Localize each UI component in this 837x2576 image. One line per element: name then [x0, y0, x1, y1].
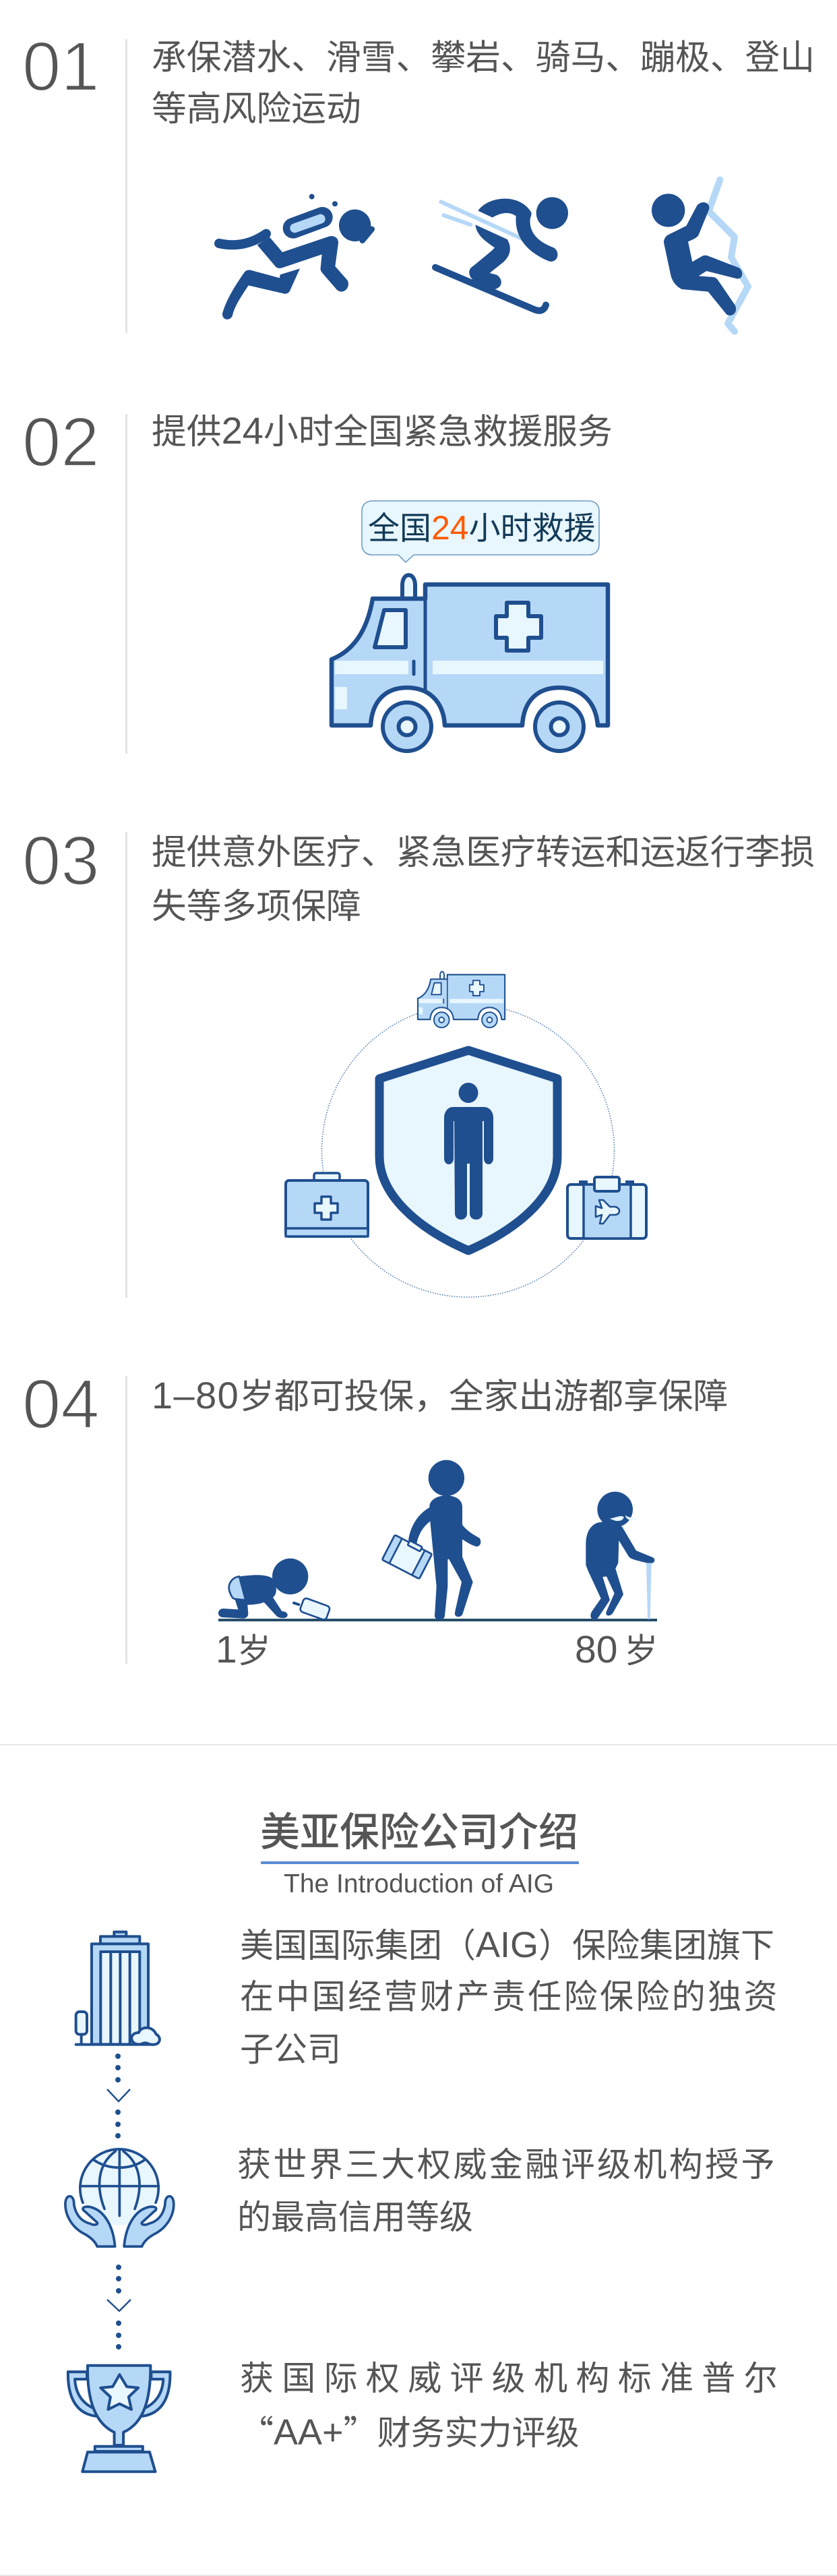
dotted ring — [322, 1005, 615, 1297]
icon: ambulance — [332, 575, 608, 751]
age figures — [218, 1460, 657, 1621]
text block 1 line 2: 在中国经营财产责任险保险的独资 — [240, 1978, 780, 2016]
protection diagram — [284, 971, 648, 1298]
divider: page bottom — [0, 2575, 837, 2576]
icon: travel suitcase — [567, 1177, 646, 1238]
connector 2 — [107, 2265, 131, 2349]
icons: sports — [214, 177, 751, 335]
heading 03 line 1: 提供意外医疗、紧急医疗转运和运返行李损 — [152, 833, 815, 872]
callout and ambulance — [329, 500, 611, 753]
divider 04 — [125, 1376, 127, 1664]
divider 03 — [125, 832, 127, 1298]
heading 01 line 2: 等高风险运动 — [152, 89, 361, 128]
icon: person — [444, 1083, 493, 1220]
text block 3 line 1: 获国际权威评级机构标准普尔 — [240, 2360, 786, 2397]
divider: top of company introduction — [0, 1744, 837, 1745]
icon: baby — [218, 1559, 330, 1621]
text block 1 line 3: 子公司 — [240, 2031, 341, 2068]
text block 1 line 1: 美国国际集团（AIG）保险集团旗下 — [240, 1925, 774, 1965]
heading 02: 提供24小时全国紧急救援服务 — [152, 409, 613, 452]
icon: office building — [76, 1932, 160, 2045]
number 04: 04 — [22, 1365, 100, 1443]
number 02: 02 — [22, 403, 100, 481]
icon: trophy — [68, 2366, 170, 2472]
text block 2 line 2: 的最高信用等级 — [237, 2198, 473, 2236]
label: 80 years: 80岁 — [575, 1628, 658, 1671]
intro title: 美亚保险公司介绍 — [260, 1810, 578, 1855]
heading 01 line 1: 承保潜水、滑雪、攀岩、骑马、蹦极、登山 — [152, 38, 815, 77]
text block 3 line 2: “AA+”财务实力评级 — [240, 2406, 580, 2455]
panel: company introduction — [64, 1810, 786, 2473]
icon: diver — [219, 194, 372, 320]
number 01: 01 — [22, 28, 100, 105]
panel: 01 high-risk sports — [22, 28, 815, 335]
icon: shield — [379, 1050, 557, 1251]
connector 1 — [107, 2054, 130, 2138]
divider 01 — [125, 39, 127, 333]
icon: small ambulance — [416, 971, 506, 1027]
heading 03 line 2: 失等多项保障 — [152, 887, 361, 926]
icon: adult with briefcase — [382, 1460, 480, 1620]
icon: skier — [435, 197, 568, 311]
icon: globe in hands — [65, 2147, 174, 2246]
intro subtitle: The Introduction of AIG — [284, 1869, 554, 1898]
intro icons column — [64, 1931, 175, 2473]
panel: 04 age coverage — [22, 1365, 728, 1671]
callout bubble — [362, 501, 599, 562]
callout bubble: 全国24小时救援 — [368, 509, 596, 547]
icon: climber — [652, 180, 748, 332]
divider 02 — [125, 414, 127, 754]
title underline — [261, 1861, 579, 1864]
icon: first aid kit — [286, 1173, 368, 1236]
icon: elderly person with cane — [586, 1492, 654, 1619]
panel: 03 multiple protections — [22, 822, 815, 1298]
heading 04: 1–80岁都可投保，全家出游都享保障 — [152, 1374, 728, 1416]
panel: 02 24-hour rescue — [22, 403, 613, 754]
text block 2 line 1: 获世界三大权威金融评级机构授予 — [237, 2146, 777, 2184]
ground line — [218, 1619, 657, 1621]
number 03: 03 — [22, 822, 100, 899]
label: 1 year: 1岁 — [216, 1628, 271, 1671]
